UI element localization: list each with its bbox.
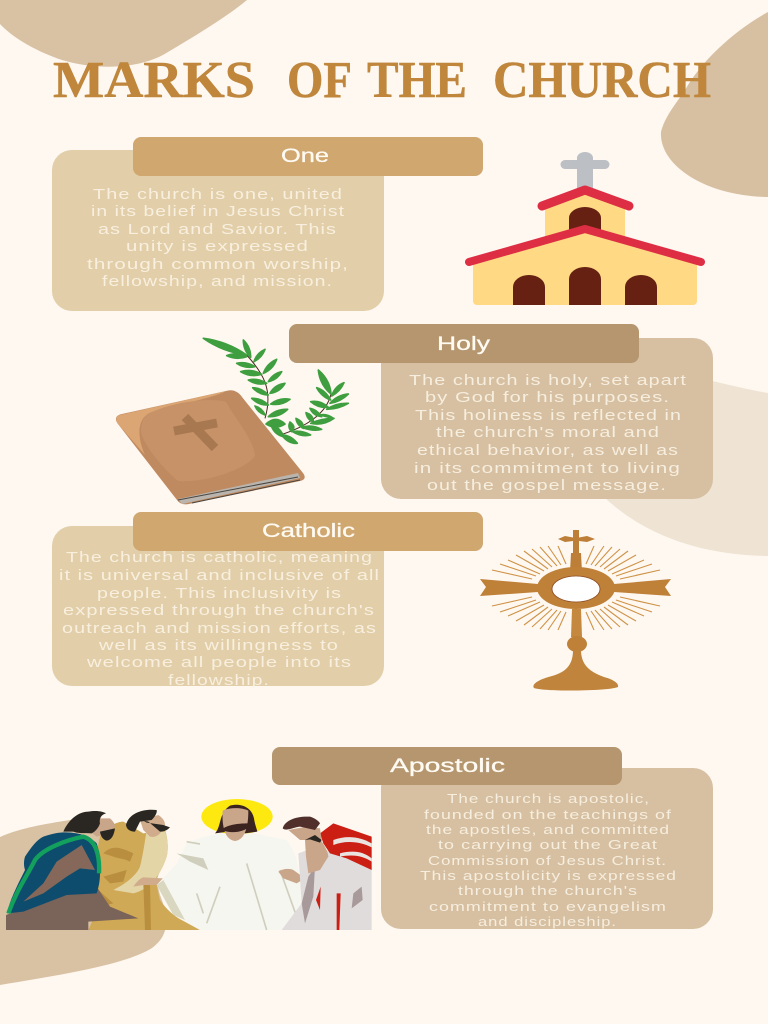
text: apostolic description [420,791,677,929]
text: apostolic description: through the church's [458,883,638,898]
text: catholic description: it is universal and inclusive of all [59,568,380,584]
text: one description: unity is expressed [126,239,309,255]
icon: bible with branches [116,338,348,504]
Jesus halo [201,799,273,834]
text: apostolic description: the apostles, and committed [426,822,670,837]
disciple: gold robe [88,810,200,930]
text: one description: The church is one, united [93,187,343,203]
text: catholic description: well as its willingness to [98,638,339,654]
blob: middle right [605,378,768,556]
text: holy description [409,373,687,494]
panel: catholic [52,512,483,689]
text: catholic description: people. This inclusivity is [97,586,342,602]
book cross [174,417,217,448]
panel: apostolic [272,747,713,929]
blob: bottom left [0,819,166,985]
card: catholic header [133,512,483,551]
heading: holy: Holy [437,333,490,355]
text: catholic description: fellowship. [168,673,270,689]
text: one description: in its belief in Jesus Christ [91,204,345,220]
text: catholic description: The church is catholic, meaning [66,550,373,566]
illustration: apostles with Jesus [6,799,372,930]
text: apostolic description: founded on the teachings of [424,807,672,822]
book cover [116,390,305,504]
text: holy description: The church is holy, set apart [409,373,687,389]
icon: church [469,152,701,305]
Jesus robe [157,833,305,930]
disciple: red robe [282,817,372,930]
title [53,52,711,109]
text: one description: fellowship, and mission. [102,274,333,290]
card: apostolic header [272,747,622,785]
text: holy description: the church's moral and [436,425,660,441]
book pages [178,473,300,504]
branches [203,338,348,443]
text: apostolic description: This apostolicity is expressed [420,868,677,883]
text: holy description: ethical behavior, as well as [417,443,679,459]
text: catholic description: expressed through the church's [63,603,375,619]
title: MARKS [53,52,255,109]
panel: one [52,137,483,311]
text: one description [87,187,349,290]
card: one header [133,137,483,176]
card: one body [52,150,384,311]
text: apostolic description: to carrying out the Great [438,837,658,852]
title: OF [287,52,352,109]
icon: monstrance [480,530,671,691]
text: catholic description: welcome all people into its [86,655,352,671]
card: holy header [289,324,639,363]
heading: catholic: Catholic [262,520,355,542]
text: holy description: by God for his purposes. [425,390,670,406]
disciple: blue robe [6,811,138,930]
text: catholic description: outreach and mission efforts, as [62,621,377,637]
text: holy description: This holiness is reflected in [415,408,682,424]
title: CHURCH [493,52,711,109]
heading: apostolic: Apostolic [390,755,505,777]
blob: top right [661,12,768,197]
text: apostolic description: The church is apostolic, [447,791,650,806]
title: THE [367,52,467,109]
text: apostolic description: Commission of Jesus Christ. [428,853,667,868]
text: catholic description [59,550,380,689]
text: holy description: out the gospel message. [427,478,667,494]
card: catholic body [52,526,384,686]
Jesus head [215,805,257,841]
text: holy description: in its commitment to living [414,461,681,477]
blob: top left [0,0,247,67]
card: apostolic body [381,768,713,929]
text: one description: through common worship, [87,257,349,273]
text: one description: as Lord and Savior. This [98,222,337,238]
text: apostolic description: and discipleship. [478,914,617,929]
heading: one: One [281,145,329,167]
panel: holy [289,324,713,499]
text: apostolic description: commitment to evangelism [429,899,667,914]
card: holy body [381,338,713,499]
